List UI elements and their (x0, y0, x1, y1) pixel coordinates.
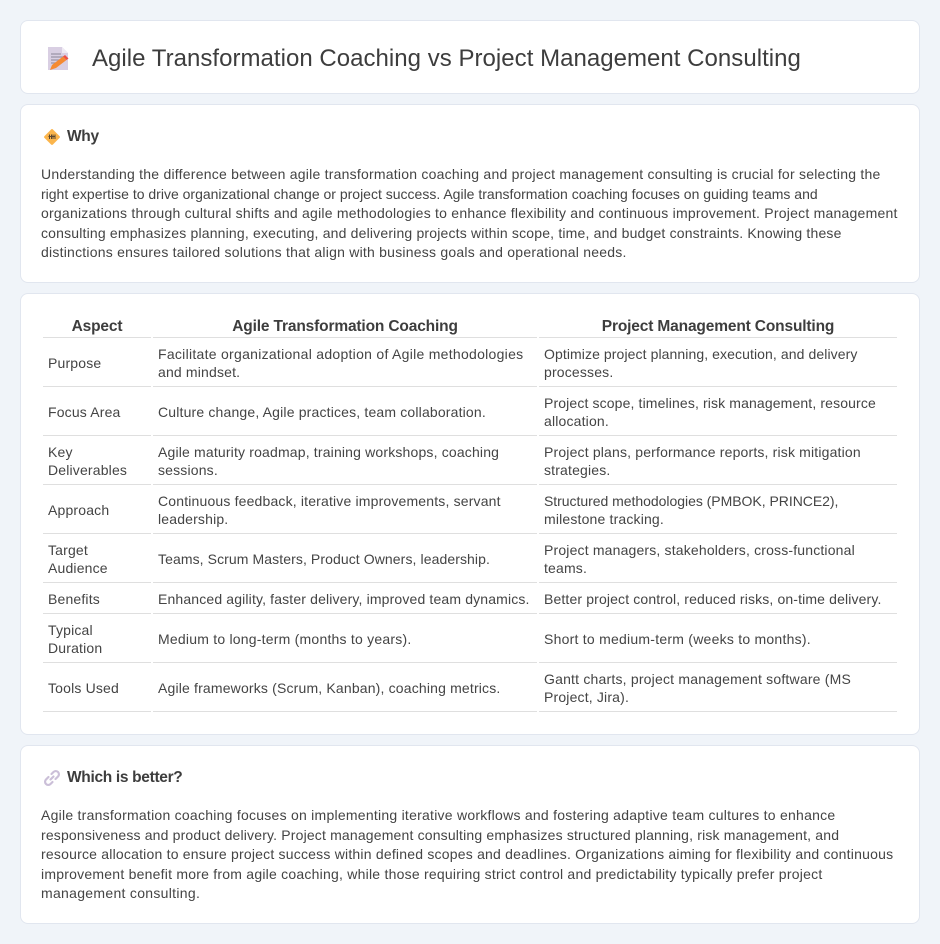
cell: agile benefits: Enhanced agility, faster delivery, improved team dynamics. (158, 591, 530, 607)
table header: agile transformation coaching: Agile Transformation Coaching (232, 318, 458, 335)
cell: agile duration: Medium to long-term (months to years). (158, 631, 411, 647)
cell: pm approach: milestone tracking. (544, 511, 664, 527)
row label: target audience (48, 542, 108, 576)
row label: typical duration: Typical (48, 622, 93, 638)
icon: memo with pencil (48, 47, 68, 70)
icon: link (44, 770, 60, 786)
row label: tools used: Tools Used (48, 680, 119, 696)
cell: pm purpose: Optimize project planning, execution, and delivery (544, 346, 857, 362)
cell: pm deliverables (544, 444, 861, 478)
panel: which is better (20, 745, 920, 924)
cell: agile approach: leadership. (158, 511, 228, 527)
row label: key deliverables (48, 444, 127, 478)
cell: agile focus: Culture change, Agile practices, team collaboration. (158, 404, 486, 420)
cell: pm tools: Gantt charts, project management software (MS (544, 671, 851, 687)
text block: which is better: improvement benefit more from agile coaching, while those requiring strict control and predictability typically prefer project (41, 866, 822, 882)
row label: typical duration (48, 622, 102, 656)
cell: pm purpose (544, 346, 858, 380)
text block: which is better: responsiveness and product delivery. Project management consulting emphasizes structured planning, risk management, and (41, 827, 839, 843)
row label: typical duration: Duration (48, 640, 102, 656)
heading: which is better: Which is better? (67, 769, 182, 786)
row label: target audience: Target (48, 542, 88, 558)
cell: agile deliverables: Agile maturity roadmap, training workshops, coaching (158, 444, 499, 460)
cell: agile deliverables (158, 444, 499, 478)
cell: pm focus: Project scope, timelines, risk management, resource (544, 395, 876, 411)
text block: why: Understanding the difference between agile transformation coaching and project management consulting is crucial for selecting the (41, 166, 881, 182)
table header: project management consulting: Project Management Consulting (602, 318, 834, 335)
cell: pm deliverables: strategies. (544, 462, 610, 478)
cell: agile deliverables: sessions. (158, 462, 218, 478)
cell: pm approach (544, 493, 838, 527)
table header: aspect: Aspect (72, 318, 122, 335)
panel: comparison table (20, 293, 920, 735)
cell: agile approach: Continuous feedback, iterative improvements, servant (158, 493, 501, 509)
cell: pm audience: teams. (544, 560, 587, 576)
row label: focus area: Focus Area (48, 404, 121, 420)
row label: key deliverables: Key (48, 444, 73, 460)
cell: agile approach (158, 493, 501, 527)
row label: purpose: Purpose (48, 355, 101, 371)
icon: diamond sign (44, 129, 60, 145)
row label: target audience: Audience (48, 560, 108, 576)
cell: agile tools: Agile frameworks (Scrum, Kanban), coaching metrics. (158, 680, 500, 696)
panel: header (20, 20, 920, 94)
text block: which is better (41, 807, 893, 901)
text block: why: right expertise to drive organizational change or project success. Agile transformation coaching focuses on guiding teams and (41, 186, 818, 202)
cell: pm audience (544, 542, 855, 576)
cell: agile purpose: and mindset. (158, 364, 240, 380)
cell: agile audience: Teams, Scrum Masters, Product Owners, leadership. (158, 551, 490, 567)
cell: pm benefits: Better project control, reduced risks, on-time delivery. (544, 591, 882, 607)
panel: why (20, 104, 920, 283)
cell: pm focus (544, 395, 876, 429)
cell: pm audience: Project managers, stakeholders, cross-functional (544, 542, 855, 558)
text block: why: distinctions ensures tailored solutions that align with business goals and operational needs. (41, 244, 627, 260)
title: Agile Transformation Coaching vs Project Management Consulting (92, 45, 801, 72)
cell: pm tools (544, 671, 851, 705)
text block: why: consulting emphasizes planning, executing, and delivering projects within scope, time, and budget constraints. Knowing these (41, 225, 842, 241)
cell: pm deliverables: Project plans, performance reports, risk mitigation (544, 444, 861, 460)
cell: pm purpose: processes. (544, 364, 613, 380)
text block: why: organizations through cultural shifts and agile methodologies to enhance flexibility and continuous improvement. Project management (41, 205, 898, 221)
row label: benefits: Benefits (48, 591, 100, 607)
row label: approach: Approach (48, 502, 109, 518)
cell: pm duration: Short to medium-term (weeks to months). (544, 631, 811, 647)
heading: why: Why (67, 128, 99, 145)
cell: pm tools: Project, Jira). (544, 689, 629, 705)
cell: pm focus: allocation. (544, 413, 609, 429)
text block: why (41, 166, 898, 260)
cell: pm approach: Structured methodologies (PMBOK, PRINCE2), (544, 493, 838, 509)
text block: which is better: resource allocation to ensure project success within defined scopes and deadlines. Organizations aiming for flexibility and continuous (41, 846, 893, 862)
row label: key deliverables: Deliverables (48, 462, 127, 478)
text block: which is better: management consulting. (41, 885, 200, 901)
cell: agile purpose (158, 346, 523, 380)
text block: which is better: Agile transformation coaching focuses on implementing iterative workflows and fostering adaptive team cultures to enhance (41, 807, 835, 823)
cell: agile purpose: Facilitate organizational adoption of Agile methodologies (158, 346, 523, 362)
